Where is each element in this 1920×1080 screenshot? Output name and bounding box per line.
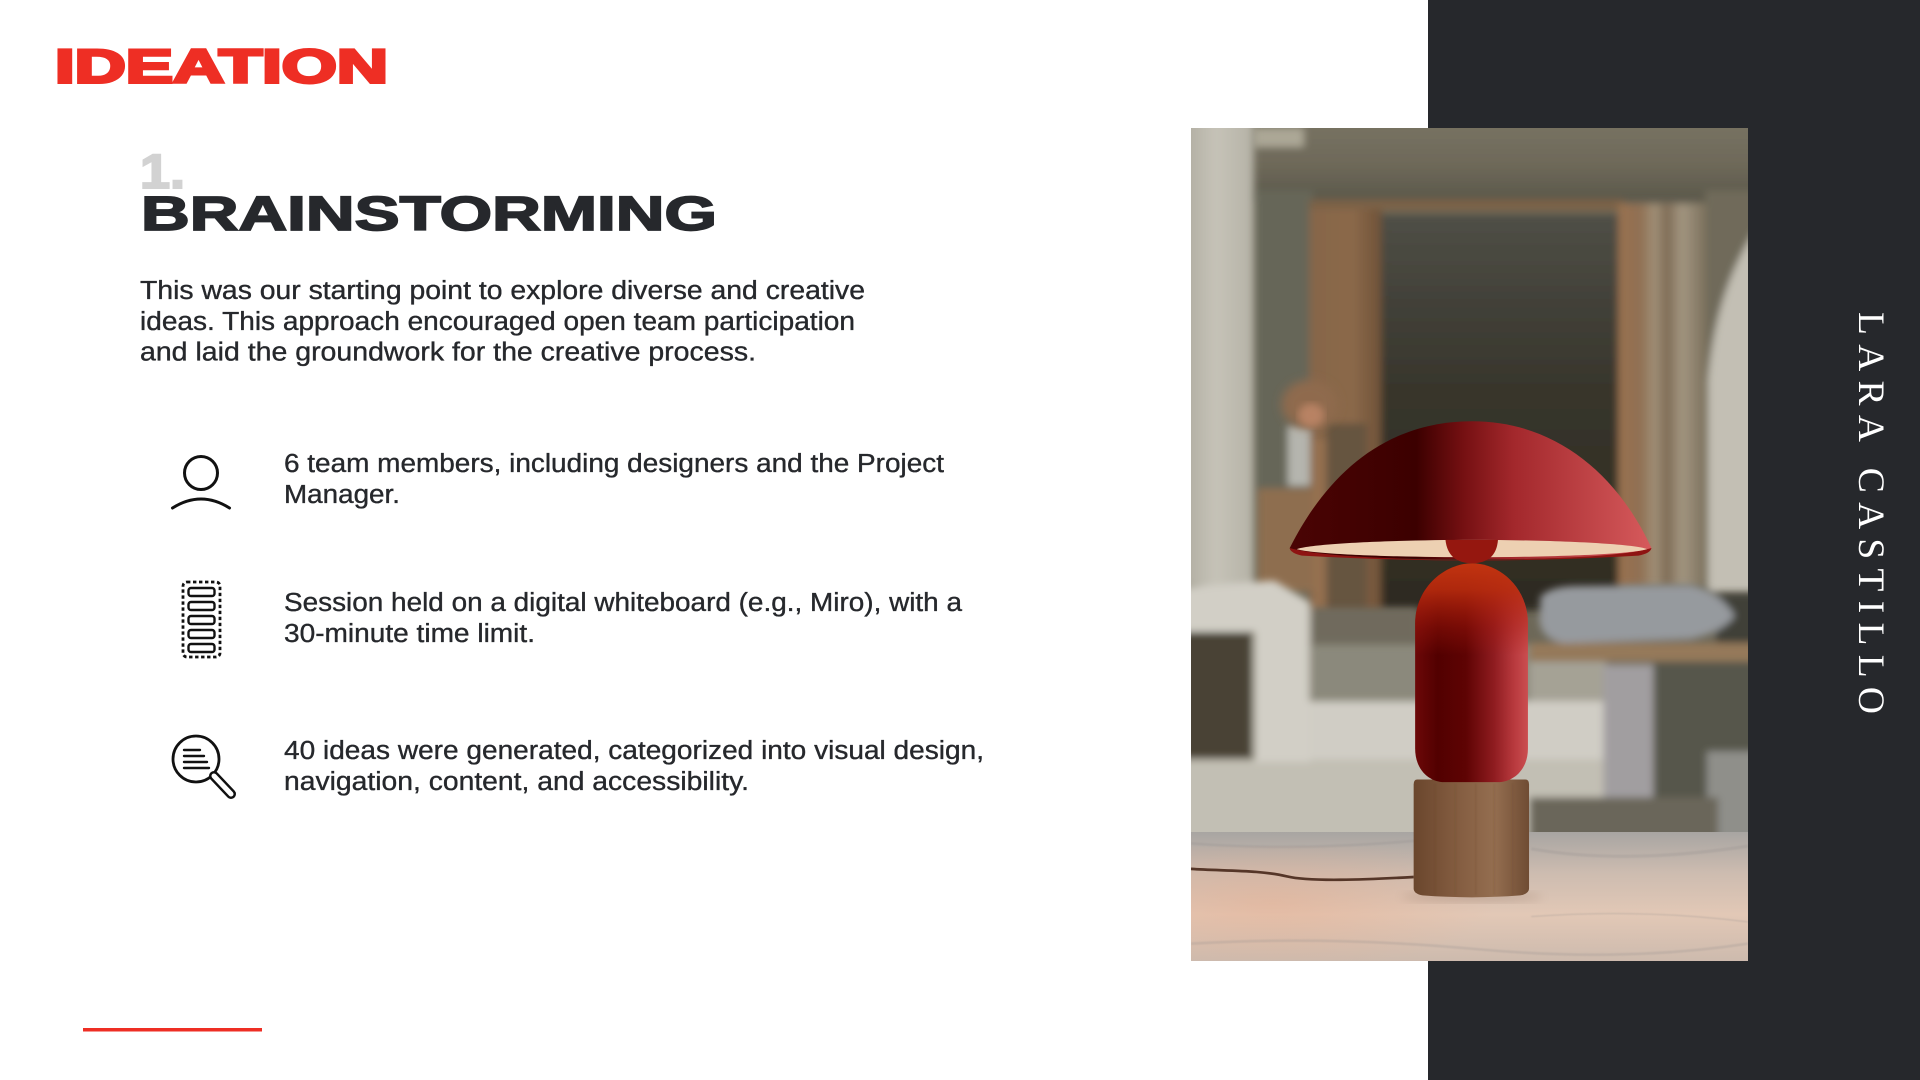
intro paragraph: This was our starting point to explore diverse and creative (140, 277, 865, 305)
text: session: Session held on a digital whiteboard (e.g., Miro), with a (284, 589, 963, 617)
text: team members: 6 team members, including designers and the Project (284, 450, 944, 478)
blurred interior background (1169, 104, 1764, 970)
marble table top (1180, 832, 1760, 970)
intro paragraph: ideas. This approach encouraged open team participation (140, 308, 855, 336)
text: ideas (284, 737, 984, 796)
lamp body (1415, 563, 1528, 782)
text: session: 30-minute time limit. (284, 620, 535, 648)
text: session (284, 589, 963, 648)
text: ideas: navigation, content, and accessibility. (284, 768, 749, 796)
text: ideas: 40 ideas were generated, categorized into visual design, (284, 737, 984, 765)
lamp shade (1290, 421, 1651, 563)
dark side panel (1428, 0, 1920, 1080)
section number: 1. (140, 146, 185, 199)
intro paragraph: and laid the groundwork for the creative process. (140, 338, 756, 366)
heading: BRAINSTORMING: BRAINSTORMING (141, 187, 717, 241)
photo: red mushroom table lamp (1191, 128, 1748, 961)
text: team members (284, 450, 944, 509)
intro paragraph (140, 277, 865, 366)
icon: whiteboard (183, 582, 220, 657)
icon: person (172, 456, 230, 508)
text: team members: Manager. (284, 481, 400, 509)
icon: magnifier (173, 736, 231, 794)
red accent line (83, 1028, 262, 1032)
wooden lamp base (1414, 779, 1529, 897)
vertical name: LARA CASTILLO: LARA CASTILLO (1850, 312, 1891, 714)
title: IDEATION: IDEATION (55, 40, 388, 92)
